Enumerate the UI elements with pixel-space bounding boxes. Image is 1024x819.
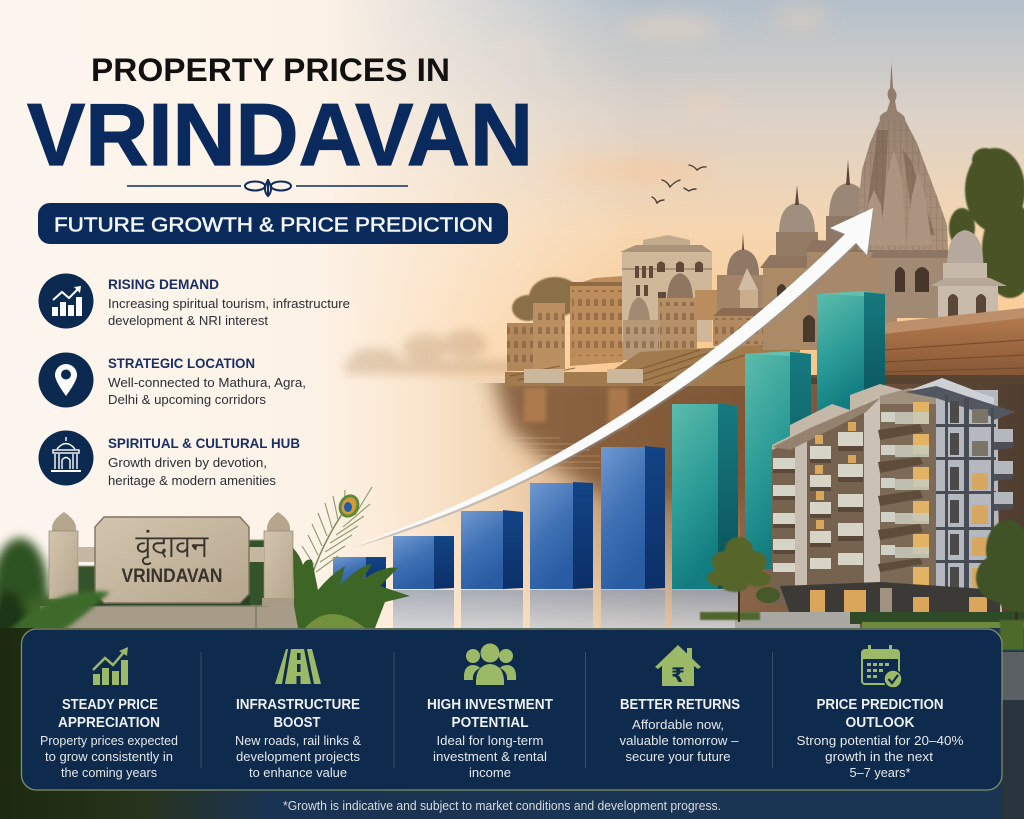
subtitle pill (38, 203, 508, 244)
left wing (772, 378, 1015, 612)
column: better returns: secure your future (626, 749, 730, 764)
right section (936, 390, 998, 612)
fern plants (293, 548, 410, 628)
left foliage (0, 538, 120, 810)
column: high investment potential: Ideal for long-term (436, 733, 544, 748)
feature: rising demand: development & NRI interest (108, 313, 268, 328)
building reflection in water (479, 383, 745, 508)
ornamental divider (127, 179, 408, 196)
feature: strategic location: Well-connected to Mathura, Agra, (108, 375, 306, 390)
feature: rising demand: Increasing spiritual tourism, infrastructure (108, 296, 350, 311)
column: steady price appreciation: APPRECIATION (58, 715, 160, 731)
bar 3 (461, 510, 523, 589)
bar reflections (393, 590, 738, 628)
feature: spiritual and cultural hub: SPIRITUAL & CULTURAL HUB (108, 435, 300, 451)
rails (78, 547, 264, 562)
feature: rising demand (38, 274, 350, 328)
column: infrastructure boost: BOOST (274, 715, 321, 731)
bar 7 (745, 351, 811, 570)
right post (262, 512, 295, 606)
column: steady price appreciation: Property prices expected (40, 733, 178, 748)
column: infrastructure boost: to enhance value (249, 765, 347, 780)
column: price prediction outlook: OUTLOOK (846, 715, 915, 731)
background: sky and water (0, 0, 1024, 628)
dome C group (695, 290, 721, 320)
ground floor (780, 582, 1000, 614)
feature: rising demand: RISING DEMAND (108, 276, 219, 292)
feature: strategic location: Delhi & upcoming corridors (108, 392, 266, 407)
icon: chart (38, 274, 94, 328)
column: infrastructure boost (235, 649, 361, 780)
column: steady price appreciation (40, 647, 178, 780)
bar 6 (672, 403, 738, 589)
left foreground leaf (0, 591, 110, 665)
distant hazy town (345, 330, 515, 374)
title line 2: VRINDAVAN (27, 85, 533, 184)
bar chart (333, 291, 885, 628)
subtitle pill: FUTURE GROWTH & PRICE PREDICTION (54, 214, 493, 236)
page title (27, 52, 533, 184)
birds (652, 165, 706, 203)
column: price prediction outlook: 5–7 years* (850, 765, 910, 780)
column: high investment potential: HIGH INVESTMENT (427, 697, 553, 713)
tree near bars (707, 537, 780, 622)
main shikhara temple (858, 62, 950, 318)
plate text: Hindi: वृंदावन (135, 525, 209, 573)
icon: temple (38, 430, 94, 486)
right tree (949, 148, 1024, 298)
bar 8 (817, 291, 885, 415)
icon: house with rupee: ₹ (671, 663, 685, 687)
front dome and base, centre (667, 273, 693, 298)
stone Vrindavan sign (40, 512, 312, 628)
cream fade over left side (0, 0, 640, 630)
column: better returns: valuable tomorrow – (620, 733, 739, 748)
icon: green growth chart (93, 647, 128, 685)
bar 5 (601, 446, 665, 589)
column: price prediction outlook (796, 645, 964, 780)
footnote: *Growth is indicative and subject to market conditions and development progress. (283, 798, 721, 813)
column: infrastructure boost: New roads, rail links & (235, 733, 361, 748)
right pavilion (930, 230, 1007, 318)
bar 2 (393, 536, 454, 589)
bar 1 (333, 557, 386, 589)
column: price prediction outlook: Strong potential for 20–40% (796, 733, 964, 748)
column: high investment potential (427, 644, 553, 780)
bar 4 (530, 482, 593, 589)
boats (524, 369, 643, 383)
steps (505, 345, 800, 386)
stone base (40, 606, 312, 628)
tree right of building (976, 520, 1024, 624)
feature: spiritual and cultural hub: Growth driven by devotion, (108, 455, 267, 470)
icon: people (464, 644, 516, 685)
white palace (622, 252, 712, 342)
column: high investment potential: investment & rental (433, 749, 547, 764)
left ghat buildings (505, 62, 1024, 386)
column: steady price appreciation: to grow consistently in (45, 749, 173, 764)
column: infrastructure boost: INFRASTRUCTURE (236, 697, 360, 713)
column: better returns: BETTER RETURNS (620, 697, 740, 713)
pavilion domes (760, 160, 897, 350)
right embankment wall (883, 308, 1024, 384)
column: better returns (620, 645, 740, 764)
left balconies (773, 432, 863, 572)
centre section (880, 398, 936, 612)
title line 1: PROPERTY PRICES IN (91, 52, 450, 88)
column: steady price appreciation: STEADY PRICE (62, 697, 158, 713)
left post (49, 512, 78, 599)
bottom panel (22, 629, 1002, 790)
icon: calendar with check (862, 645, 902, 688)
column: infrastructure boost: development projects (236, 749, 360, 764)
name plate (95, 517, 249, 603)
column: price prediction outlook: growth in the next (825, 749, 933, 764)
apartment building (772, 378, 1015, 614)
column: price prediction outlook: PRICE PREDICTION (816, 697, 944, 713)
right balconies (994, 429, 1013, 504)
column: high investment potential: POTENTIAL (452, 715, 529, 731)
column: high investment potential: income (469, 765, 511, 780)
column: steady price appreciation: the coming years (61, 765, 157, 780)
ground and lawn (700, 612, 1024, 628)
feature: strategic location (38, 352, 306, 408)
icon: road (275, 649, 321, 684)
growth arrow (352, 208, 874, 548)
icon: map pin (38, 352, 94, 408)
column: better returns: Affordable now, (632, 717, 724, 732)
plate text: English: VRINDAVAN (122, 566, 222, 587)
sign hedge behind (78, 540, 267, 606)
feature: spiritual and cultural hub (38, 430, 300, 488)
feature: strategic location: STRATEGIC LOCATION (108, 355, 255, 371)
feature: spiritual and cultural hub: heritage & modern amenities (108, 473, 277, 488)
peacock feather (298, 487, 372, 590)
bottom band below the panel (0, 620, 1024, 819)
